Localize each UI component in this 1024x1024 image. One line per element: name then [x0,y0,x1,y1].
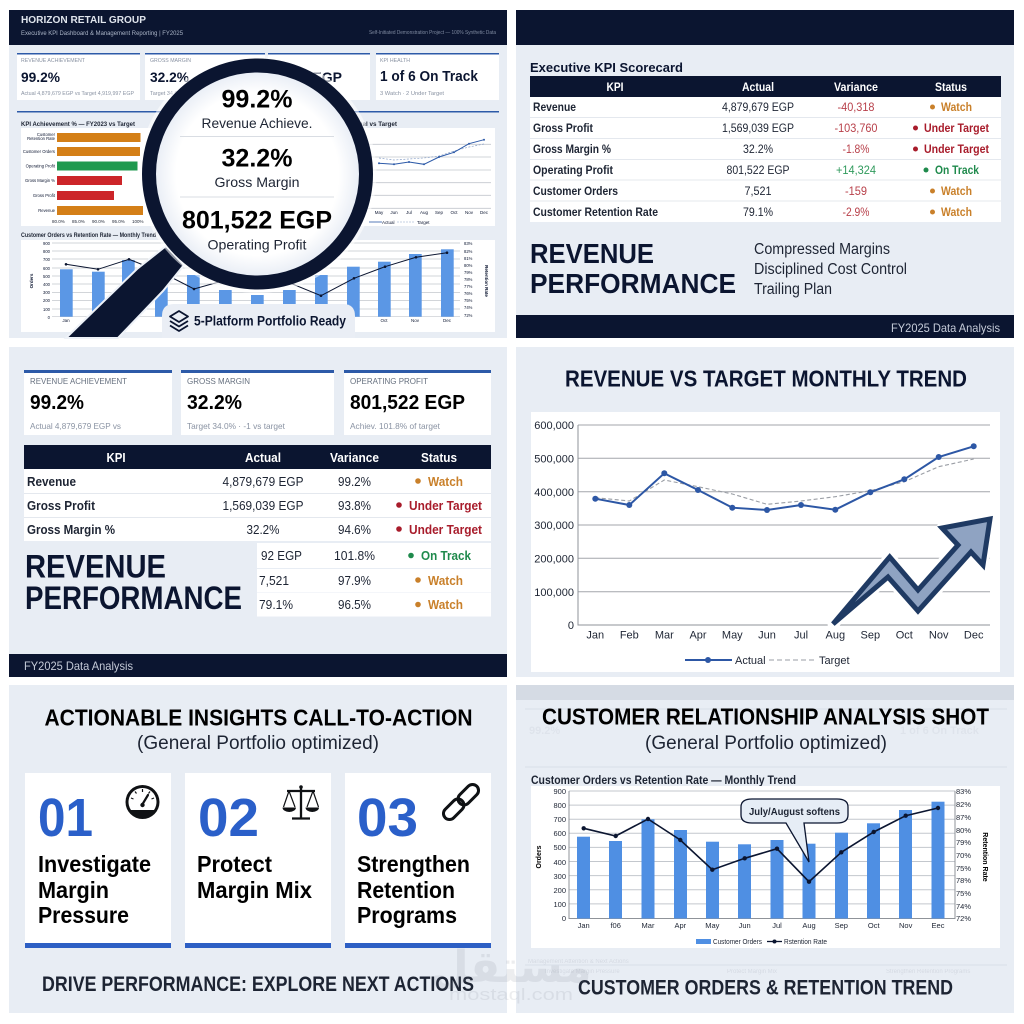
KPI card: gross margin: Target 34.0% · -1 vs target [187,421,286,431]
call to action line: DRIVE PERFORMANCE: EXPLORE NEXT ACTIONS [42,973,474,996]
header banner [9,10,507,45]
chart: orders and retention thumbnail: 200 [43,298,51,303]
table: KPI achievement: Under Target [409,522,483,537]
table: scorecard: 79.1% [743,207,773,219]
chart legend [696,939,827,946]
chart: orders and retention thumbnail: 75% [464,298,473,303]
chart: orders and retention thumbnail: 79% [464,270,473,275]
card: strengthen retention programs [345,773,491,948]
combo chart: orders and retention: Retention Rate [981,832,988,882]
KPI card row: REVENUE ACHIEVEMENT [21,58,86,64]
card: protect margin mix: Protect [197,851,272,877]
card: investigate margin pressure: Margin [38,877,109,903]
chart: revenue line thumbnail: Actual [382,220,395,225]
chart: orders and retention thumbnail: Nov [411,318,420,323]
chart: orders and retention thumbnail: 83% [464,241,473,246]
chart: orders and retention thumbnail: 600 [43,266,51,271]
combo chart: orders and retention: 78% [956,876,971,885]
combo chart: orders and retention: Oct [868,921,880,930]
combo chart: orders and retention: Sep [835,921,848,930]
combo chart: orders and retention: 300 [553,872,566,881]
panel: customer relationship analysis: Protect Margin Mix [727,969,777,975]
line chart: revenue vs target [531,412,1000,672]
icon: gauge [126,785,160,819]
chart: KPI achievement bars: KPI Achievement % — FY2023 vs Target [21,121,136,128]
line chart: revenue vs target: Mar [655,630,674,642]
chart: revenue line thumbnail: Oct [450,210,458,215]
combo chart: orders and retention: 700 [553,815,566,824]
table: scorecard: Customer Orders [533,186,618,198]
magnifier lens with KPI callouts: Operating Profit [208,236,307,252]
combo chart: orders and retention: Apr [674,921,687,930]
heading: revenue performance [530,238,736,299]
text block: performance notes: Compressed Margins [754,241,890,258]
chart: orders and retention thumbnail: 700 [43,257,51,262]
panel: KPI cards and table [9,347,507,677]
magnifier lens with KPI callouts: 99.2% [222,86,292,114]
heading: revenue performance overlay: PERFORMANCE [25,580,242,616]
combo chart: orders and retention: 70% [956,851,971,860]
chart: KPI achievement bars: Customer [37,132,56,137]
table: scorecard: 7,521 [744,186,772,198]
chart legend: Actual [735,655,766,667]
table: scorecard: Watch [941,102,972,114]
chart: revenue line thumbnail: Revenue Actual vs Target [321,121,398,128]
line chart: revenue vs target: May [722,630,743,642]
chart: orders and retention thumbnail: 400 [43,282,51,287]
chart: orders and retention thumbnail: 100 [43,307,51,312]
chart title: Customer Orders vs Retention Rate — Monthly Trend [531,773,796,787]
badge: 5-platform portfolio ready: 5-Platform Portfolio Ready [194,314,346,328]
chart: revenue line thumbnail [321,121,495,226]
KPI card row [17,53,499,100]
chart: orders and retention thumbnail: 900 [43,241,51,246]
KPI card: operating profit: 801,522 EGP [350,392,465,414]
table: KPI achievement: 101.8% [334,548,375,563]
table: KPI achievement: Gross Profit [27,498,96,513]
chart: KPI achievement bars: Gross Margin % [25,178,55,183]
combo chart: orders and retention: 600 [553,829,566,838]
KPI card row: 99.2% [21,69,61,85]
line chart: revenue vs target: Aug [826,630,845,642]
KPI card row: 32.2% [150,69,190,85]
table: KPI achievement: 97.9% [338,573,371,588]
line chart: revenue vs target: Jan [586,630,604,642]
table: scorecard: Revenue [533,102,576,114]
combo chart: orders and retention [531,786,1000,948]
KPI card: operating profit: OPERATING PROFIT [350,376,428,386]
combo chart: orders and retention: 83% [956,787,971,796]
chart: KPI achievement bars: 90.0% [92,219,105,224]
chart: KPI achievement bars: Retention Rate [27,136,56,141]
table: scorecard: KPI [606,82,624,94]
KPI card: gross margin [181,370,334,435]
magnifier lens with KPI callouts [138,55,376,293]
heading: actionable insights title: ACTIONABLE INSIGHTS CALL-TO-ACTION [44,704,472,730]
line chart: revenue vs target: Oct [896,630,913,642]
magnifier lens with KPI callouts: 32.2% [222,144,292,172]
card: strengthen retention programs: 03 [357,788,418,848]
line chart: revenue vs target: Feb [620,630,639,642]
table: KPI achievement: 93.8% [338,498,371,513]
table: KPI achievement: 92 EGP [261,548,302,563]
chart: orders and retention thumbnail: Orders [29,273,34,288]
chart: KPI achievement bars: 85.0% [72,219,85,224]
table: KPI achievement: 1,569,039 EGP [222,498,304,513]
callout: July/August softens: July/August softens [749,806,840,818]
panel: customer relationship analysis: Strengthen Retention Programs [886,969,970,975]
chart: orders and retention thumbnail: Dec [443,318,452,323]
panel: dashboard overview with magnifier [9,10,507,338]
combo chart: orders and retention: Orders [536,845,543,868]
chart: orders and retention thumbnail: 500 [43,274,51,279]
combo chart: orders and retention: Jan [578,921,590,930]
combo chart: orders and retention: Eec [932,921,945,930]
KPI card row: Target 34.0% [150,91,183,97]
heading: scorecard title: Executive KPI Scorecard [530,60,683,75]
KPI card: revenue achievement: 99.2% [30,392,84,414]
table: KPI achievement: 32.2% [246,522,280,537]
icon: magnifying glass handle [66,246,184,338]
icon: balance scales [282,785,319,818]
combo chart: orders and retention: 82% [956,800,971,809]
magnifier lens with KPI callouts: 801,522 EGP [182,206,332,234]
chart: orders and retention thumbnail: 77% [464,284,473,289]
line chart: revenue vs target: 0 [568,620,574,632]
chart: KPI achievement bars: 80.0% [52,219,65,224]
table: scorecard: 801,522 EGP [726,165,790,177]
combo chart: orders and retention: 400 [553,858,566,867]
chart: KPI achievement bars: Gross Profit [33,193,56,198]
heading: revenue performance overlay [25,548,242,616]
line chart: revenue vs target: 100,000 [534,587,574,599]
chart: revenue line thumbnail: Target [417,220,430,225]
KPI card row: KPI HEALTH [380,58,410,64]
KPI card: revenue achievement: REVENUE ACHIEVEMENT [30,376,127,386]
panel: actionable insights [9,685,507,1013]
chart: revenue line thumbnail: Sep [435,210,443,215]
table: scorecard: Variance [834,82,878,94]
table: KPI achievement: Variance [330,450,379,465]
chart legend: Customer Orders [713,939,762,946]
combo chart: orders and retention: f06 [610,921,621,930]
table: scorecard: -103,760 [834,123,878,135]
table: scorecard: Watch [941,186,972,198]
table: KPI achievement: 99.2% [338,474,371,489]
card: strengthen retention programs: Programs [357,902,457,928]
callout: July/August softens [741,799,848,862]
card: investigate margin pressure: 01 [38,788,93,848]
card: protect margin mix: 02 [198,788,259,848]
combo chart: orders and retention: 79% [956,838,971,847]
combo chart: orders and retention: Jun [739,921,751,930]
chart: orders and retention thumbnail: 78% [464,277,473,282]
table: scorecard: Watch [941,207,972,219]
line chart: revenue vs target: Sep [861,630,880,642]
table: scorecard: On Track [935,165,980,177]
chart: orders and retention thumbnail: 82% [464,249,473,254]
combo chart: orders and retention: Jul [772,921,782,930]
combo chart: orders and retention: 900 [553,787,566,796]
combo chart: orders and retention: Aug [802,921,816,930]
watermark: مستقل [431,942,591,993]
footer band [516,315,1014,338]
panel: customer relationship analysis: Investigate Margin Pressure [545,969,620,975]
table: scorecard: 4,879,679 EGP [722,102,794,114]
table: KPI achievement: Revenue [27,474,76,489]
table: KPI achievement: Gross Margin % [27,522,115,537]
panel: customer relationship analysis: 1 of 6 On Track [900,725,980,737]
watermark: mostaql.com [449,985,573,1004]
KPI card: operating profit [344,370,491,435]
combo chart: orders and retention: 72% [956,914,971,923]
combo chart: orders and retention: 800 [553,801,566,810]
combo chart: orders and retention: 0 [562,914,566,923]
chart legend [685,655,850,667]
combo chart: orders and retention: 500 [553,843,566,852]
chart legend: Rstention Rate [784,939,827,946]
table: KPI achievement: 7,521 [259,573,289,588]
KPI card: operating profit: Achiev. 101.8% of target [350,421,441,431]
table: scorecard: Status [935,82,967,94]
table: scorecard: +14,324 [836,165,877,177]
table: scorecard: Gross Profit [533,123,593,135]
heading: revenue performance: PERFORMANCE [530,268,736,299]
table: scorecard: Under Target [924,144,989,156]
chart: orders and retention thumbnail: 0 [48,315,51,320]
KPI card row: 3 Watch · 2 Under Target [380,91,444,97]
card: investigate margin pressure: Investigate [38,851,151,877]
badge: 5-platform portfolio ready [162,304,355,338]
table: KPI achievement: Under Target [409,498,483,513]
card: strengthen retention programs: Retention [357,877,455,903]
chart: orders and retention thumbnail: 80% [464,263,473,268]
table: scorecard: Operating Profit [533,165,613,177]
chart: KPI achievement bars: Revenue [38,208,56,213]
table: scorecard: -159 [845,186,867,198]
chart: revenue line thumbnail: Nov [465,210,474,215]
chart: orders and retention thumbnail: 81% [464,256,473,261]
table: scorecard: Customer Retention Rate [533,207,658,219]
combo chart: orders and retention: 200 [553,886,566,895]
chart: revenue line thumbnail: Aug [420,210,428,215]
text block: performance notes: Trailing Plan [754,281,832,298]
icon: chain link [441,782,481,822]
chart: orders and retention thumbnail: 76% [464,291,473,296]
chart: revenue line thumbnail: May [375,210,384,215]
line chart: revenue vs target: Dec [964,630,984,642]
combo chart: orders and retention: 80% [956,826,971,835]
table: scorecard: Under Target [924,123,989,135]
card: investigate margin pressure: Pressure [38,902,129,928]
footer band [9,654,507,677]
table: KPI achievement: Watch [428,474,463,489]
table: KPI achievement: Watch [428,597,463,612]
text block: performance notes [754,241,907,298]
text block: performance notes: Disciplined Cost Control [754,261,907,278]
panel: executive KPI scorecard [516,10,1014,338]
heading: revenue performance overlay: REVENUE [25,548,166,584]
table: scorecard [530,76,1001,222]
line chart: revenue vs target: 300,000 [534,520,574,532]
table: KPI achievement: KPI [106,450,126,465]
heading: trend title: REVENUE VS TARGET MONTHLY TREND [565,366,967,392]
combo chart: orders and retention: Mar [642,921,655,930]
line chart: revenue vs target: 500,000 [534,454,574,466]
heading: customer relationship title: CUSTOMER RELATIONSHIP ANALYSIS SHOT [542,704,989,730]
KPI card: gross margin: 32.2% [187,392,242,414]
chart: orders and retention thumbnail: 300 [43,290,51,295]
table: KPI achievement: Watch [428,573,463,588]
card: protect margin mix: Margin Mix [197,877,312,903]
combo chart: orders and retention: 87% [956,813,971,822]
card: investigate margin pressure [25,773,171,948]
chart: KPI achievement bars: Customer Orders [23,149,55,154]
heading: actionable insights title: (General Portfolio optimized) [137,733,379,754]
line chart: revenue vs target: Jun [758,630,776,642]
table: scorecard: -2.9% [842,207,870,219]
table: KPI achievement [24,445,491,616]
chart: KPI achievement bars [21,121,161,226]
icon: upward zigzag arrow [833,519,990,624]
header banner: HORIZON RETAIL GROUP [21,15,146,26]
heading: revenue performance: REVENUE [530,238,654,269]
card: protect margin mix [185,773,331,948]
line chart: revenue vs target: 600,000 [534,420,574,432]
table: scorecard: -1.8% [842,144,870,156]
KPI card row: 1 of 6 On Track [380,69,479,85]
chart: orders and retention thumbnail: 800 [43,249,51,254]
icon: stacked layers [170,311,188,331]
chart: orders and retention thumbnail: Jan [62,318,70,323]
panel: customer relationship analysis: Management Attention & Next Actions [528,959,629,965]
chart: KPI achievement bars: Operating Profit [26,164,56,168]
card: strengthen retention programs: Strengthen [357,851,470,877]
chart: orders and retention thumbnail: 74% [464,305,473,310]
table: KPI achievement: Actual [245,450,281,465]
heading: customer relationship title [542,704,989,754]
magnifier lens with KPI callouts: Revenue Achieve. [202,115,312,131]
chart: orders and retention thumbnail: Customer Orders vs Retention Rate — Monthly Trend [21,232,156,239]
table: KPI achievement: On Track [421,548,472,563]
line chart: revenue vs target: 400,000 [534,487,574,499]
chart: revenue line thumbnail: Jun [390,210,398,215]
combo chart: orders and retention: 100 [553,900,566,909]
table: KPI achievement: 94.6% [338,522,371,537]
heading: actionable insights title [44,704,472,754]
table: KPI achievement: 79.1% [259,597,293,612]
table: scorecard: 1,569,039 EGP [722,123,794,135]
combo chart: orders and retention: 75% [956,889,971,898]
magnifier lens with KPI callouts: Gross Margin [214,174,300,190]
chart: KPI achievement bars: 100% [132,219,144,224]
table: KPI achievement: 96.5% [338,597,371,612]
chart: revenue line thumbnail: Dec [480,210,489,215]
KPI card row: GROSS MARGIN [150,58,191,64]
combo chart: orders and retention: 75% [956,864,971,873]
combo chart: orders and retention: May [705,921,720,930]
header banner: Self-Initiated Demonstration Project — 100% Synthetic Data [369,30,496,36]
footer band: FY2025 Data Analysis [24,659,133,673]
table: KPI achievement: Status [421,450,457,465]
combo chart: orders and retention: 74% [956,902,971,911]
panel: customer relationship analysis [516,685,1014,1013]
KPI card: gross margin: GROSS MARGIN [187,376,250,386]
chart: orders and retention thumbnail: Oct [380,318,388,323]
chart: revenue line thumbnail: Jul [406,210,412,215]
panel: revenue vs target trend [516,347,1014,677]
chart: orders and retention thumbnail [21,232,495,332]
heading: customer relationship title: (General Portfolio optimized) [645,733,887,754]
panel: customer relationship analysis: 99.2% [529,725,560,737]
combo chart: orders and retention: Nov [899,921,913,930]
chart: KPI achievement bars: 95.0% [112,219,125,224]
table: KPI achievement: 4,879,679 EGP [222,474,304,489]
chart: orders and retention thumbnail: 72% [464,313,473,318]
footer band: FY2025 Data Analysis [891,321,1000,335]
chart legend: Target [819,655,850,667]
KPI card: revenue achievement: Actual 4,879,679 EGP vs [30,421,121,431]
table: scorecard: Gross Margin % [533,144,611,156]
KPI card row: EGP [312,69,342,85]
line chart: revenue vs target: Nov [929,630,949,642]
KPI card row: Actual 4,879,679 EGP vs Target 4,919,997 EGP [21,91,134,97]
line chart: revenue vs target: Apr [689,630,707,642]
table: scorecard: 32.2% [743,144,773,156]
table: scorecard: Actual [742,82,774,94]
line chart: revenue vs target: Jul [794,630,808,642]
table: scorecard: -40,318 [838,102,874,114]
caption: customer orders and retention trend: CUSTOMER ORDERS & RETENTION TREND [578,976,953,1000]
header banner: Executive KPI Dashboard & Management Reporting | FY2025 [21,30,183,37]
KPI card: revenue achievement [24,370,172,435]
chart: orders and retention thumbnail: Retention Rate [484,265,489,297]
line chart: revenue vs target: 200,000 [534,554,574,566]
